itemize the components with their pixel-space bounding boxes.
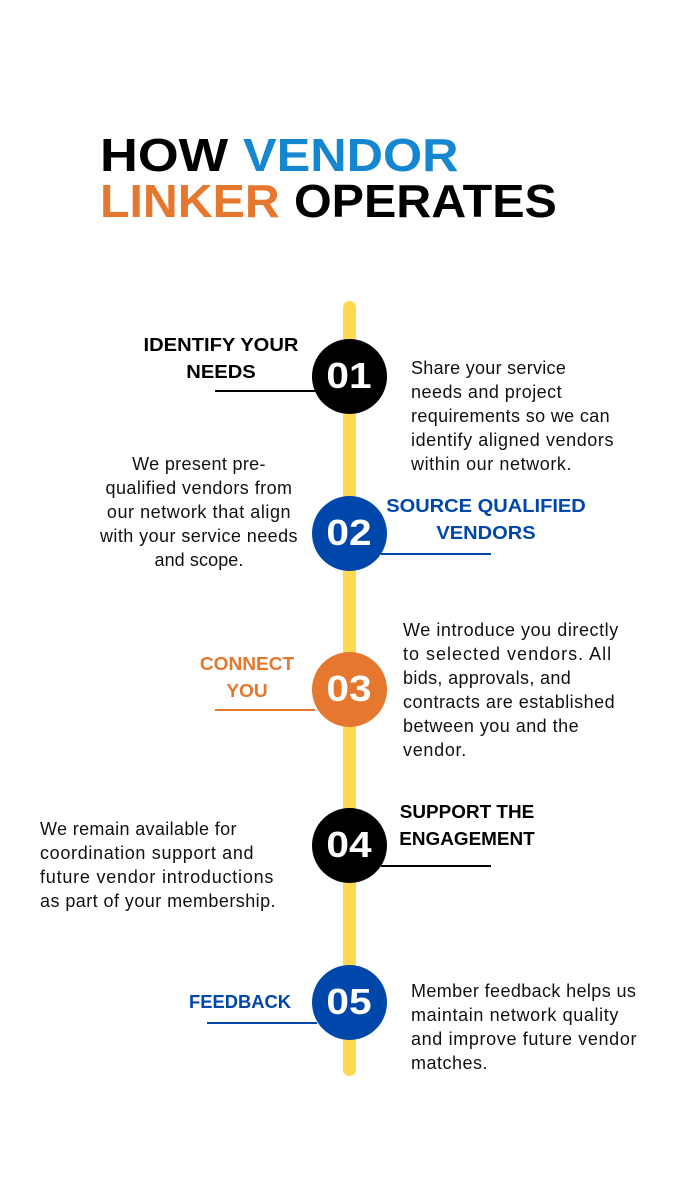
step 3 text: contracts are established [403,692,615,712]
step 3 heading [200,654,294,701]
step 1 text: identify aligned vendors [411,430,614,450]
step 1 text [411,358,614,474]
step 4 circle [312,808,387,883]
step 1 text: needs and project [411,382,562,402]
step 2 heading: SOURCE QUALIFIED [386,496,586,516]
step 1 heading: IDENTIFY YOUR [144,335,298,355]
step 2 text: and scope. [154,550,244,570]
step 5 text: maintain network quality [411,1005,619,1025]
step 2 line [381,553,491,555]
step 3 line [215,709,315,711]
step 2 circle [312,496,387,571]
step 2 circle: 02 [327,512,372,553]
step 5 circle: 05 [327,981,372,1022]
step 2 text: our network that align [107,502,291,522]
step 3 circle [312,652,387,727]
step 3 [200,620,619,760]
step 2 heading: VENDORS [436,523,536,543]
step 1 text: within our network. [411,454,572,474]
step 4 circle: 04 [327,824,372,865]
step 4 text: We remain available for [40,819,237,839]
step 4 line [381,865,491,867]
step 1 circle: 01 [327,355,372,396]
step 2 text: with your service needs [100,526,298,546]
step 4 heading [399,802,535,849]
timeline bar [343,301,356,1076]
step 3 text: bids, approvals, and [403,668,571,688]
step 4 [40,802,535,911]
title [100,129,557,227]
step 2 text: qualified vendors from [106,478,292,498]
step 1 text: requirements so we can [411,406,610,426]
step 4 text: future vendor introductions [40,867,274,887]
title: OPERATES [294,175,557,227]
title: VENDOR [243,129,459,181]
step 4 text [40,819,276,911]
title: HOW [100,129,228,181]
step 2 text: We present pre- [132,454,266,474]
step 5 text [411,981,637,1073]
step 4 heading: ENGAGEMENT [399,829,535,849]
step 4 text: coordination support and [40,843,254,863]
step 5 line [207,1022,317,1024]
step 1 heading: NEEDS [186,362,256,382]
step 1 line [215,390,315,392]
step 4 heading: SUPPORT THE [400,802,534,822]
step 1 heading [144,335,298,382]
step 1 [144,335,614,474]
title: LINKER [100,175,280,227]
step 3 text: We introduce you directly [403,620,619,640]
step 2 heading [386,496,586,543]
step 5 text: matches. [411,1053,488,1073]
step 2 text [100,454,298,570]
step 2 [100,454,586,571]
step 4 text: as part of your membership. [40,891,276,911]
step 5 text: Member feedback helps us [411,981,636,1001]
step 5 heading: FEEDBACK [189,992,291,1012]
step 3 text [403,620,619,760]
step 5 text: and improve future vendor [411,1029,637,1049]
step 3 circle: 03 [327,668,372,709]
step 3 text: to selected vendors. All [403,644,612,664]
step 1 circle [312,339,387,414]
step 3 heading: YOU [226,681,268,701]
step 5 [189,965,637,1073]
step 3 text: between you and the [403,716,579,736]
step 3 text: vendor. [403,740,467,760]
step 3 heading: CONNECT [200,654,294,674]
step 1 text: Share your service [411,358,566,378]
step 5 circle [312,965,387,1040]
